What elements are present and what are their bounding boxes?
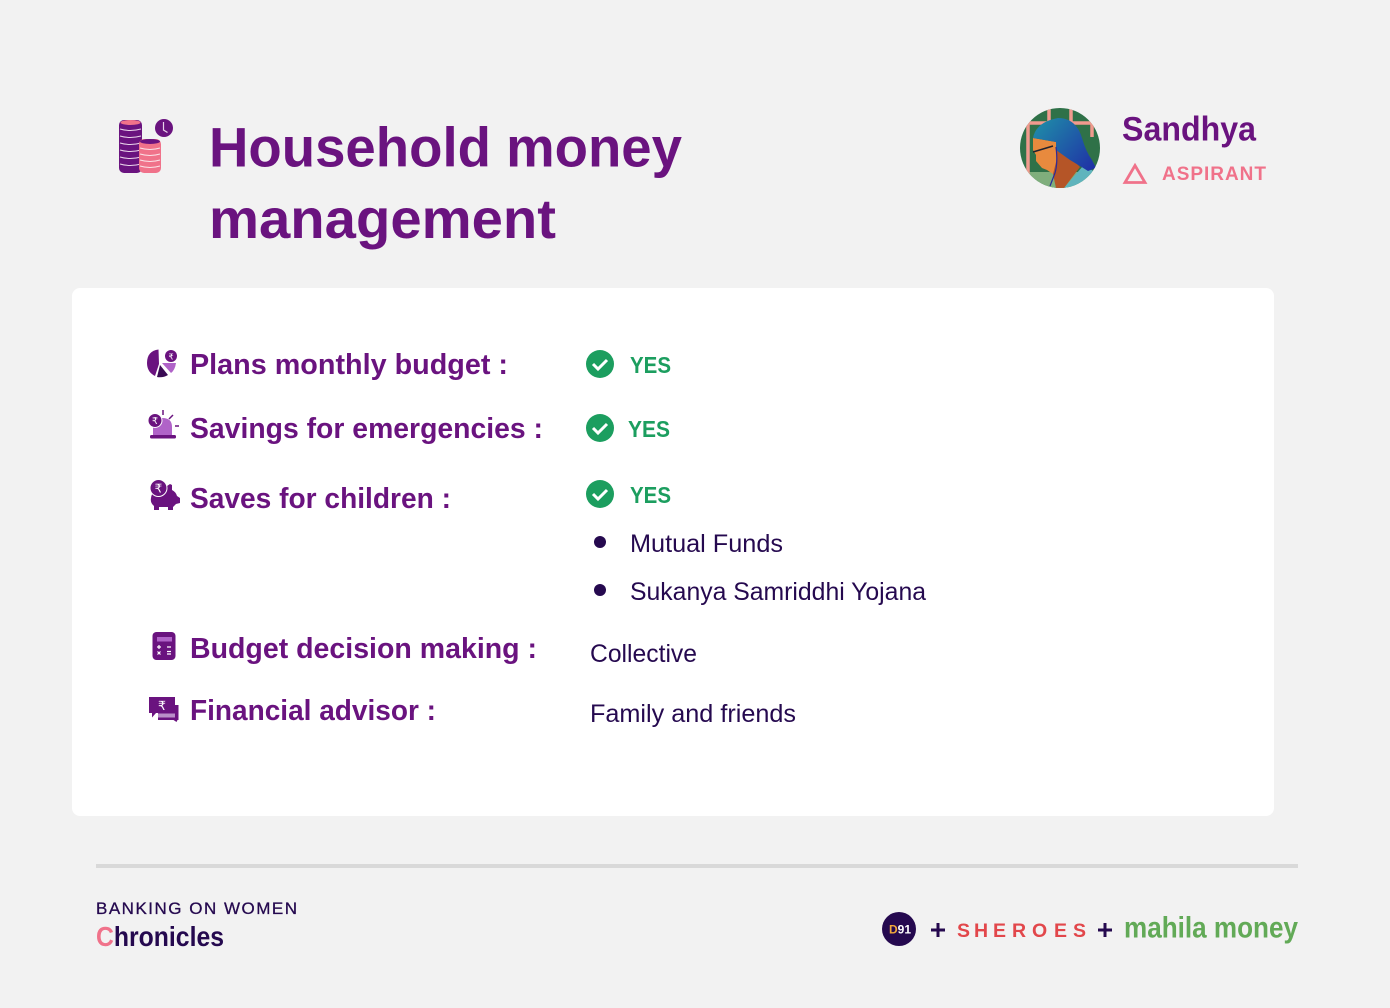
- icon: coin stacks and clock: [119, 119, 173, 173]
- footer: banking on women chronicles logo: BANKING ON WOMEN: [96, 899, 297, 918]
- footer: banking on women chronicles logo: Chronicles: [96, 921, 224, 952]
- icon: pie chart: [147, 350, 177, 377]
- bullet item: mutual funds: Mutual Funds: [630, 530, 783, 558]
- icon: speech bubbles with rupee: [149, 697, 178, 722]
- row: financial advisor: [149, 695, 796, 728]
- row: budget decision making: Budget decision making :: [190, 633, 537, 665]
- row: budget decision making: [152, 632, 697, 668]
- name: Sandhya: Sandhya: [1122, 110, 1257, 148]
- icon: piggy bank: ₹: [155, 482, 163, 496]
- logo: mahila money: mahila money: [1124, 912, 1298, 944]
- plus: [931, 923, 945, 937]
- row: financial advisor: Family and friends: [590, 700, 796, 728]
- icon: check: [586, 414, 614, 442]
- plus: [1098, 923, 1112, 937]
- bullet item: sukanya samriddhi yojana: Sukanya Samriddhi Yojana: [630, 578, 926, 606]
- icon: rupee alarm: ₹: [152, 416, 158, 427]
- icon: check: [586, 350, 614, 378]
- icon: check: [586, 480, 614, 508]
- logo: D91: [882, 912, 916, 946]
- logo: sheroes: SHEROES: [957, 920, 1086, 942]
- avatar: Sandhya portrait: [1020, 108, 1100, 188]
- row: plans monthly budget: Plans monthly budget :: [190, 349, 508, 381]
- row: savings for emergencies: Savings for emergencies :: [190, 413, 543, 445]
- title: management: [209, 187, 556, 250]
- icon: calculator: [152, 632, 176, 660]
- row: saves for children: Saves for children :: [190, 483, 451, 515]
- row: plans monthly budget: [147, 349, 671, 381]
- row: savings for emergencies: [148, 410, 670, 445]
- icon: aspirant triangle: [1125, 166, 1145, 182]
- title: [209, 116, 682, 250]
- footer: banking on women chronicles logo: [96, 899, 297, 952]
- icon: speech bubbles with rupee: ₹: [158, 699, 166, 713]
- icon: pie chart: ₹: [168, 352, 174, 362]
- persona label: aspirant: ASPIRANT: [1162, 164, 1266, 185]
- row: savings for emergencies: YES: [628, 416, 670, 442]
- logo: D91: D91: [889, 922, 911, 936]
- row: saves for children: YES: [630, 482, 671, 508]
- footer: partner logos: [882, 912, 1298, 946]
- panel: money management details: [72, 288, 1274, 816]
- title: Household money: [209, 116, 682, 178]
- icon: piggy bank: [150, 480, 180, 510]
- row: saves for children: [150, 480, 926, 606]
- icon: rupee alarm: [148, 410, 179, 438]
- row: financial advisor: Financial advisor :: [190, 695, 436, 727]
- row: plans monthly budget: YES: [630, 352, 671, 378]
- row: budget decision making: Collective: [590, 640, 697, 668]
